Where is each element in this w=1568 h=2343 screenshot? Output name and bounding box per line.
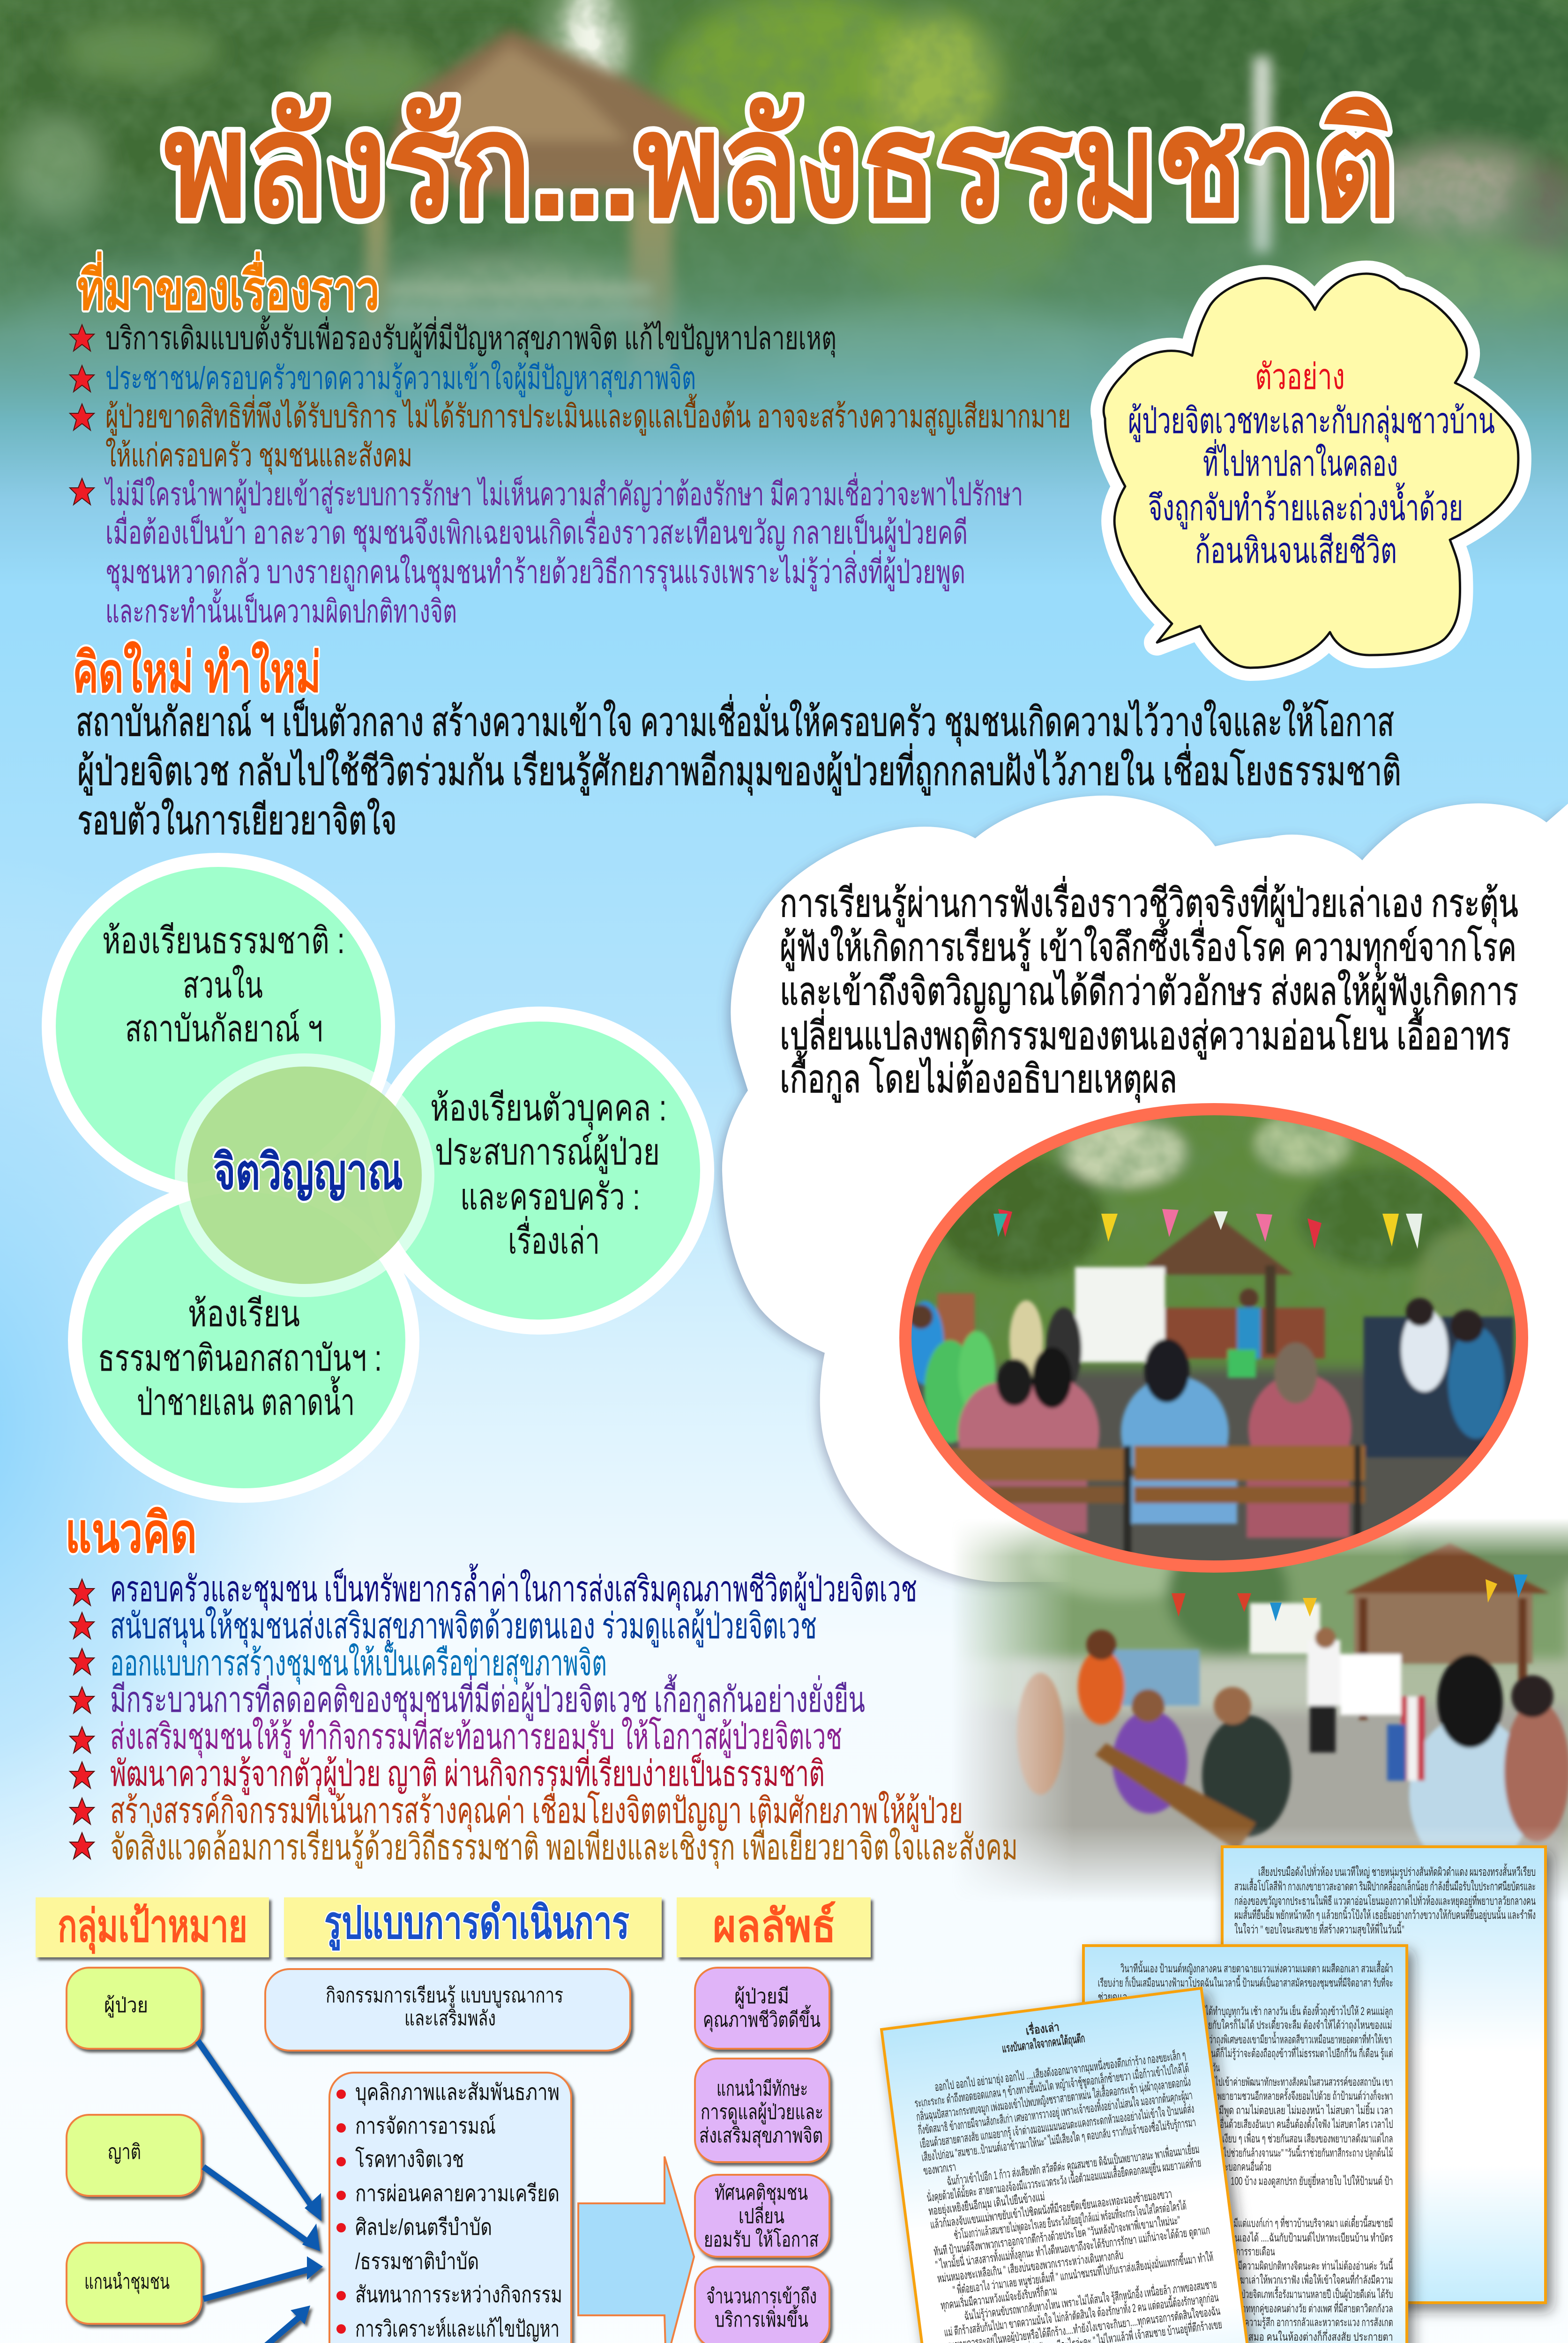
document: story page tilted front: ทันที ป้ามนต์จึงพาพวกเราออกจากตึกร้างด้วยประโยค "วันหลังป้าจะพาพี่เขามาใหม่นะ"	[933, 2212, 1181, 2259]
document: story page tilted front: เรื่องเล่า	[1025, 2019, 1060, 2038]
document: story page tilted front: ทอยยุ่งเหยิงยืนอีกมุม เดินไปยืนข้างแม่	[928, 2189, 1045, 2218]
cloud shape	[1104, 274, 1518, 668]
document: story page middle: อื่นด้วยเสียงอันเบา คนอื่นต้องตั้งใจฟัง ไม่สบตาใคร เวลาไป	[1220, 2116, 1393, 2131]
concept bullet list	[110, 1563, 1018, 1869]
document: story page middle: ิการรายเดือน	[1232, 2246, 1275, 2258]
document: story page middle: ไปเข้าค่ายพัฒนาทักษะทางสังคมในสวนสวรรค์ของสถาบัน เขา	[1214, 2075, 1393, 2089]
document: story page middle: าททุกคู่ของคนต่างวัย ต่างเพศ ที่มีสายตาวิตกกังวล	[1242, 2301, 1393, 2315]
paragraph: รอบตัวในการเยียวยาจิตใจ	[77, 798, 397, 843]
document: story page tilted front	[881, 1988, 1260, 2343]
circle: outdoor classroom	[68, 1178, 419, 1503]
document: story page tilted front: ฉันก้าวเข้าไปอีก 1 ก้าว ส่งเสียงทัก สวัสดีค่ะ คุณสมชาย ดิฉันเป็นพยาบาลนะ พาเพื่อนมาเยี่ยม	[946, 2141, 1200, 2189]
section: think new do new	[73, 641, 1401, 843]
title: พลังรัก...พลังธรรมชาติ	[164, 84, 1396, 246]
outcome boxes	[695, 1968, 829, 2343]
document: story page tilted front: แล้วก้มลงจับแขนแม่พาขยับเข้าไปชิดผนังที่มีรอยขีดเขียนเลอะเทอะมองซ้ายมองขวา	[929, 2186, 1173, 2231]
section: origin of the story	[70, 252, 1071, 629]
document: story page tilted front: ออกไป ออกไป อย่ามายุ่ง ออกไป ....เสียงดังออกมาจากมุมหนึ่งของตึกเก่าร้าง กองขยะเล็ก ๆ	[933, 2047, 1187, 2094]
document: story page tilted front: แรงบันดาลใจจากคนใต้ถุนตึก	[1001, 2031, 1086, 2056]
left edge blue glow	[0, 843, 366, 2015]
photo: second activity in garden	[958, 1520, 1568, 1896]
target: patient: ผู้ป่วย	[104, 1994, 148, 2018]
concept bullet list: จัดสิ่งแวดล้อมการเรียนรู้ด้วยวิถีธรรมชาติ พอเพียงและเชิงรุก เพื่อเยียวยาจิตใจและสังคม	[110, 1823, 1018, 1869]
cloud paragraph	[780, 876, 1518, 1103]
venn labels: สถาบันกัลยาณ์ ฯ	[125, 1008, 323, 1049]
outcome boxes: ยอมรับ ให้โอกาส	[704, 2228, 819, 2251]
header: operating model	[284, 1897, 662, 1957]
paragraph	[76, 694, 1401, 843]
origin bullet list: ประชาชน/ครอบครัวขาดความรู้ความเข้าใจผู้มีปัญหาสุขภาพจิต	[105, 360, 696, 397]
box: activity list: /ธรรมชาติบำบัด	[355, 2249, 479, 2274]
header: operating model: รูปแบบการดำเนินการ	[324, 1898, 629, 1951]
icon: red star bullets	[70, 1579, 94, 1859]
box: activity list	[329, 2073, 571, 2343]
document: story page middle: ความรู้สึก อาการกลัวและหวาดระแวง การสังเกต	[1245, 2316, 1393, 2329]
concept bullet list: ออกแบบการสร้างชุมชนให้เป็นเครือข่ายสุขภาพจิต	[110, 1642, 607, 1685]
target: community leaders	[67, 2243, 202, 2324]
box: activity list: ศิลปะ/ดนตรีบำบัด	[355, 2215, 492, 2240]
venn labels: เรื่องเล่า	[508, 1216, 600, 1261]
target: relatives	[67, 2115, 202, 2196]
document: story page middle: เงียบ ๆ เพื่อน ๆ ช่วยกันสอน เสียงของพยาบาลดังมาแต่ไกล	[1222, 2131, 1393, 2145]
document: story page middle: นดีก็ไม่รู้ว่าจะต้องถือถุงข้าวที่ไม่ธรรมดาไปอีกกี่วัน กี่เดือน รู้แต่	[1211, 2045, 1393, 2060]
document: story page tilted front: " พี่ต๋อยเอาไง ว่ามาเลย หนูช่วยเต็มที่ " แกนนำชมรมที่ไปกับเราส่งเสียงมุ่งมั่นแทรกขึ้นมา ทำให้	[952, 2248, 1214, 2298]
origin bullet list: ไม่มีใครนำพาผู้ป่วยเข้าสู่ระบบการรักษา ไม่เห็นความสำคัญว่าต้องรักษา มีความเชื่อว่าจะพาไปรักษา	[104, 472, 1023, 514]
arrows: targets into activities	[198, 2041, 323, 2343]
document: story page tilted front: ของพวกเรา	[923, 2160, 957, 2178]
document: story page tilted front: ชั่วโมงกว่าแล้วสมชายไม่พูดอะไรเลย ยืนระวังภัยอยู่ใกล้แม่ พร้อมที่จะกระโจนใส่ใครต่อใครได้	[953, 2197, 1187, 2243]
concept bullet list: ครอบครัวและชุมชน เป็นทรัพยากรล้ำค่าในการส่งเสริมคุณภาพชีวิตผู้ป่วยจิตเวช	[110, 1563, 917, 1611]
outcome boxes: จำนวนการเข้าถึง	[706, 2285, 817, 2308]
document: story page middle: มีความผิดปกติทางจิตนะคะ ท่านไม่ต้องอ่านค่ะ วันนี้	[1238, 2258, 1393, 2272]
photo: story circle oval	[890, 1097, 1537, 1582]
document: story page middle: ะบอกคนอื่นด้วย	[1225, 2159, 1271, 2173]
circle: nature classroom	[42, 853, 395, 1200]
origin bullet list: ชุมชนหวาดกลัว บางรายถูกคนในชุมชนทำร้ายด้วยวิธีการรุนแรงเพราะไม่รู้ว่าสิ่งที่ผู้ป่วยพูด	[105, 550, 965, 591]
venn labels: ห้องเรียนธรรมชาติ :	[102, 920, 345, 961]
document: story page middle: ช่วยดูแล	[1098, 1991, 1127, 2004]
callout text: ก้อนหินจนเสียชีวิต	[1195, 531, 1397, 571]
origin bullet list: บริการเดิมแบบตั้งรับเพื่อรองรับผู้ที่มีปัญหาสุขภาพจิต แก้ไขปัญหาปลายเหตุ	[105, 315, 836, 358]
outcome boxes: เปลี่ยน	[739, 2201, 784, 2228]
venn labels: ห้องเรียน	[188, 1293, 300, 1334]
venn labels: สวนใน	[183, 964, 263, 1006]
box: activity list: การจัดการอารมณ์	[355, 2114, 496, 2139]
callout text: ตัวอย่าง	[1255, 357, 1345, 397]
document: story page middle: ว่าถุงพิเศษของเขามียาน้ำหลอดสีขาวเหมือนยาหยอดตาที่ทำให้เขา	[1209, 2031, 1392, 2046]
document: story page middle	[1083, 1946, 1407, 2343]
venn labels	[98, 920, 667, 1423]
target: patient	[67, 1968, 202, 2049]
document: story page tilted front: ฉันไม่รู้ว่าคนขับรถพากลับทางไหน เพราะไม่ได้สนใจ รู้สึกหนักอึ้ง เหนื่อยล้า ภาพของสมชาย	[963, 2275, 1217, 2323]
document: story page middle: ยกับใครก็ไม่ได้ ประเดี๋ยวจะลืม ต้องจำให้ได้ว่าถุงไหนของแม่	[1208, 2017, 1392, 2032]
outcome boxes: การดูแลผู้ป่วยและ	[701, 2101, 823, 2125]
box: activity list: บุคลิกภาพและสัมพันธภาพ	[355, 2080, 560, 2106]
venn labels: ห้องเรียนตัวบุคคล :	[430, 1087, 667, 1130]
header: outcomes	[677, 1897, 871, 1957]
header: outcomes: ผลลัพธ์	[713, 1901, 836, 1951]
target: relatives: ญาติ	[108, 2141, 141, 2164]
document: story page middle: ได้ทำบุญทุกวัน เช้า กลางวัน เย็น ต้องหิ้วถุงข้าวไปให้ 2 คนแม่ลูก	[1204, 2003, 1393, 2018]
document: story page middle: ป่วยจิตเภทเรื้อรังมานานหลายปี เป็นผู้ป่วยดีเด่น ได้รับ	[1241, 2286, 1393, 2301]
origin bullet list: ผู้ป่วยขาดสิทธิที่พึงได้รับบริการ ไม่ได้รับการประเมินและดูแลเบื้องต้น อาจจะสร้างความสูญเสียมากมาย	[105, 394, 1071, 436]
document: story page tilted front: กึ่งขัดสมาธิ ข้างกายมีจานสังกะสีเก่า เศษอาหารวางอยู่ เพราะเจ้าของทิ้งอย่างไม่สนใจ มองจากต้นคุกะผู้มา	[917, 2086, 1193, 2138]
outcome boxes: บริการเพิ่มขึ้น	[715, 2305, 808, 2331]
document: story page middle: นเองได้ ....ฉันกับป้ามนต์ไปหาทะเบียนบ้าน ทำบัตร	[1234, 2231, 1393, 2244]
origin bullet list: เมื่อต้องเป็นบ้า อาละวาด ชุมชนจึงเพิกเฉยจนเกิดเรื่องราวสะเทือนขวัญ กลายเป็นผู้ป่วยคดี	[105, 511, 968, 552]
venn labels: และครอบครัว :	[460, 1176, 640, 1217]
document: story page tilted front: นั่งคุยด้วยได้มั้ยคะ สายตามองจ้องมีแววระแวดระวัง เนื้อตัวมอมแมมเสื้อยืดคอกลมยู่ยี่น ผมยาวแค่ท้าย	[926, 2154, 1202, 2205]
box: integrated learning	[265, 1969, 630, 2051]
callout text: ที่ไปหาปลาในคลอง	[1203, 439, 1398, 484]
document: story page top right	[1222, 1847, 1546, 2303]
circle: personal classroom	[366, 1007, 714, 1335]
document: story page tilted front: แม่ ตึกร้างสลับกันไปมา ขาดความมั่นใจ ไม่กล้าตัดสินใจ ต้องรักษาทั้ง 2 คน แต่ตอนนี้ต้องรักษาลูกก่อน	[943, 2289, 1219, 2340]
white cloud panel	[722, 796, 1568, 1582]
document: story page top right: ในใจว่า " ขอบใจนะสมชาย ที่สร้างความสุขให้พี่ในวันนี้"	[1234, 1921, 1404, 1937]
outcome boxes: แกนนำมีทักษะ	[717, 2077, 808, 2100]
document: story page tilted front: " ไหวมั้ยนี่ น่าสงสารทั้งแม่ทั้งลูกนะ ทำไงดีหนอเขาถึงจะได้รับการรักษา แม่ก็น่าจะได้ด้วย ดูตาแก	[934, 2221, 1210, 2272]
venn labels: ประสบการณ์ผู้ป่วย	[435, 1131, 660, 1174]
concept bullet list: สนับสนุนให้ชุมชนส่งเสริมสุขภาพจิตด้วยตนเอง ร่วมดูแลผู้ป่วยจิตเวช	[110, 1606, 817, 1648]
callout: example speech cloud	[1104, 274, 1518, 668]
circle: spirit centre	[175, 1053, 434, 1297]
target: community leaders: แกนนำชุมชน	[84, 2270, 170, 2294]
document: story page middle: ฆาเล่าให้พวกเราฟัง เพื่อให้เข้าใจคนที่กำลังมีความ	[1239, 2272, 1393, 2286]
document: story page middle: พยายามชวนอีกหลายครั้งจึงยอมไปด้วย ถ้าป้ามนต์ว่างก็จะพา	[1217, 2088, 1393, 2103]
icon: red star bullets	[70, 325, 94, 505]
centre label: จิตวิญญาณ	[213, 1145, 403, 1201]
concept bullet list: สร้างสรรค์กิจกรรมที่เน้นการสร้างคุณค่า เชื่อมโยงจิตตปัญญา เติมศักยภาพให้ผู้ป่วย	[110, 1786, 963, 1832]
outcome boxes: ส่งเสริมสุขภาพจิต	[699, 2124, 823, 2148]
flow diagram	[26, 1897, 871, 2343]
heading: concept: แนวคิด	[65, 1502, 197, 1564]
box: activity list: การวิเคราะห์และแก้ไขปัญหา	[355, 2316, 560, 2342]
outcome boxes: ทัศนคติชุมชน	[715, 2181, 808, 2205]
concept bullet list: มีกระบวนการที่ลดอคติของชุมชนที่มีต่อผู้ป่วยจิตเวช เกื้อกูลกันอย่างยั่งยืน	[110, 1674, 865, 1721]
callout text	[1128, 357, 1495, 571]
origin bullet list: และกระทำนั้นเป็นความผิดปกติทางจิต	[105, 589, 457, 629]
box: integrated learning: และเสริมพลัง	[404, 2007, 496, 2030]
document: story page tilted front: เยือนด้วยสายตาสงสัย แกมอยากรู้ เจ้าต่างมอมแมมนอนตะแคงกระดกหัวมองอย่างไม่เข้าใจ ป้ามนต์ส่ง	[919, 2102, 1195, 2151]
cloud paragraph: เกื้อกูล โดยไม่ต้องอธิบายเหตุผล	[780, 1051, 1177, 1103]
box: activity list: การผ่อนคลายความเครียด	[355, 2181, 560, 2206]
heading: think new: คิดใหม่ ทำใหม่	[73, 641, 321, 704]
document: story page middle: เสมอ คนในห้องต่างก็กึ่งสงสัย ประกายตา	[1246, 2329, 1393, 2343]
box: activity list: สันทนาการระหว่างกิจกรรม	[355, 2283, 562, 2307]
document: story page middle: มีพูด ถามไม่ตอบเลย ไม่มองหน้า ไม่สบตา ไม่ยิ้ม เวลา	[1219, 2102, 1393, 2117]
document: story page tilted front: เสียงไปก่อน "สมชาย..ป้ามนต์เอาข้าวมาให้นะ" ไม่มีเสียงใด ๆ ตอบกลับ ราวกับเจ้าของชื่อไม่รับรู้การมา	[920, 2114, 1197, 2164]
header: target group	[36, 1897, 269, 1957]
concept bullet list: พัฒนาความรู้จากตัวผู้ป่วย ญาติ ผ่านกิจกรรมที่เรียบง่ายเป็นธรรมชาติ	[110, 1749, 825, 1795]
document: story page tilted front: กลิ่นฉุนปัสสาวะกระทบจมูก เพ่งมองเข้าไปพบหญิงชราสายตาหม่น ใส่เสื้อคอกระเช้า นุ่งผ้าถุงลายดอกนั่ง	[915, 2073, 1192, 2124]
document: story page middle: วัน	[1212, 2062, 1220, 2074]
outcome boxes: คุณภาพชีวิตดีขึ้น	[703, 2005, 821, 2032]
document: story page tilted front: ระเกะระกะ ดำถึงทอดยอดแกลน ๆ ข้างทางขึ้นบันได หญ้าเจ้าชู้ชูดอกเล็กซ้ายขวา เมื่อก้าวเข้าไปใกล้ได้	[913, 2059, 1190, 2111]
document: story page tilted front: ทุกคนเริ่มมีความหวังแม้จะยังริบหรี่ก็ตาม	[940, 2283, 1058, 2313]
venn diagram: classrooms and spirit	[42, 853, 714, 1503]
concept bullet list: ส่งเสริมชุมชนให้รู้ ทำกิจกรรมที่สะท้อนการยอมรับ ให้โอกาสผู้ป่วยจิตเวช	[110, 1712, 842, 1758]
origin bullet list	[104, 315, 1071, 629]
background photo: hut and garden	[0, 0, 1568, 619]
document: story page middle: มีแต่แบงก์เก่า ๆ ที่ชาวบ้านบริจาคมา แต่เดี๋ยวนี้สมชายมี	[1233, 2215, 1393, 2230]
section: concept	[65, 1502, 1018, 1869]
outcome boxes: ผู้ป่วยมี	[734, 1985, 789, 2009]
big arrow to outcomes	[578, 2156, 694, 2343]
venn labels: ป่าชายเลน ตลาดน้ำ	[137, 1376, 355, 1423]
origin bullet list: ให้แก่ครอบครัว ชุมชนและสังคม	[105, 437, 412, 475]
box: activity list: โรคทางจิตเวช	[355, 2146, 464, 2172]
document: story page tilted front: หม่นหมองชะเหลือเกิน " เสียงบ่นของพวกเราระหว่างเดินทางกลับ	[936, 2248, 1124, 2285]
venn labels: ธรรมชาตินอกสถาบันฯ :	[98, 1337, 382, 1379]
heading: origin: ที่มาของเรื่องราว	[77, 252, 380, 321]
box: integrated learning: กิจกรรมการเรียนรู้ แบบบูรณาการ	[326, 1984, 563, 2008]
document: story page middle: ไปช่วยกันล้างจานนะ" "วันนี้เราช่วยกันทาสีกระถาง ปลูกต้นไม้	[1223, 2145, 1393, 2160]
header: target group: กลุ่มเป้าหมาย	[58, 1901, 247, 1954]
document: story page middle: 100 บ้าง มองดูสกปรก ยับยู่ยี่หลายใบ ไปให้ป้ามนต์ ป้า	[1231, 2173, 1393, 2188]
